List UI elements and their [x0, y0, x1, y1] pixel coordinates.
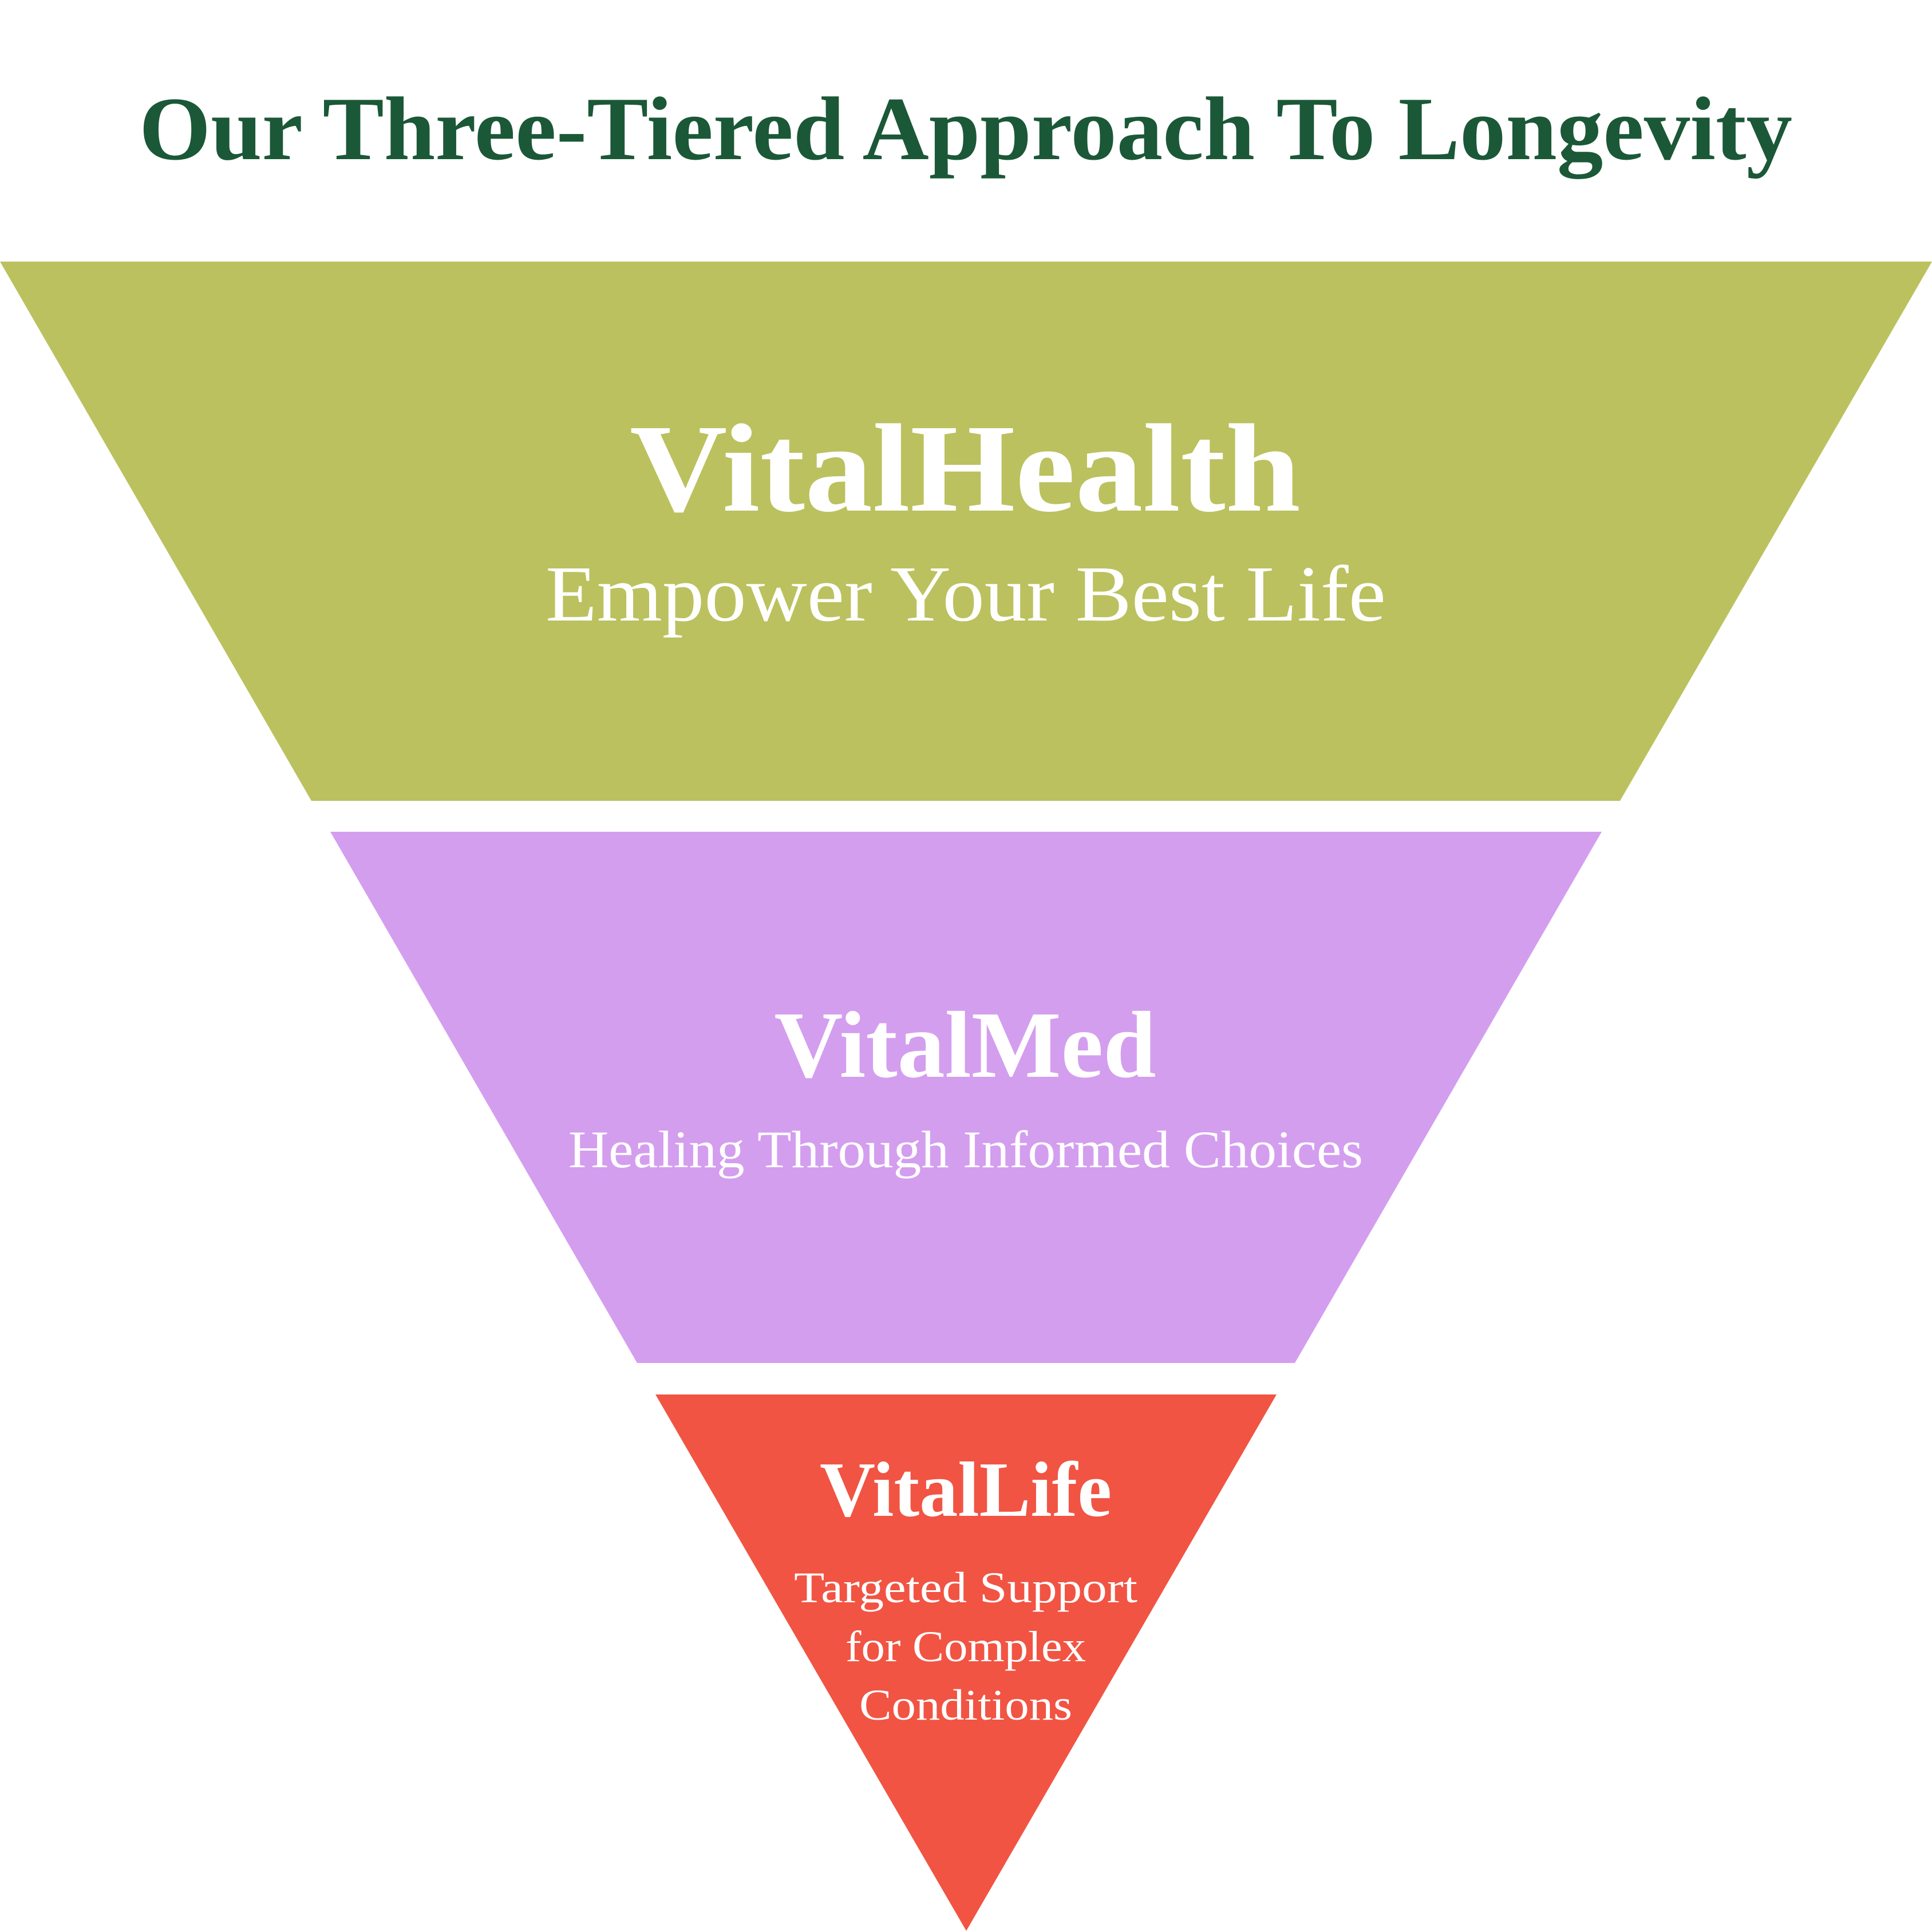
- heading: VitalHealth: VitalHealth: [630, 398, 1301, 538]
- trapezoid: VitalHealth: [0, 262, 1932, 801]
- text: Healing Through Informed Choices: Healing Through Informed Choices: [568, 1120, 1363, 1179]
- text: Targeted Support for Complex Conditions: [794, 1564, 1137, 1729]
- panel: VitalHealth tier: [0, 262, 1932, 801]
- panel: VitalLife tier: [655, 1394, 1277, 1931]
- text: Targeted Support for Complex Conditions: for Complex: [846, 1623, 1086, 1671]
- title: Our Three-Tiered Approach To Longevity: [139, 79, 1792, 179]
- trapezoid: VitalMed: [330, 832, 1602, 1363]
- text: Empower Your Best Life: Empower Your Best Life: [546, 550, 1386, 638]
- heading: VitalLife: VitalLife: [820, 1446, 1112, 1533]
- text: Targeted Support for Complex Conditions: Targeted Support: [794, 1564, 1137, 1612]
- heading: VitalMed: VitalMed: [774, 992, 1156, 1097]
- text: Targeted Support for Complex Conditions: Conditions: [859, 1681, 1072, 1729]
- triangle: VitalLife: [655, 1394, 1277, 1931]
- panel: VitalMed tier: [330, 832, 1602, 1363]
